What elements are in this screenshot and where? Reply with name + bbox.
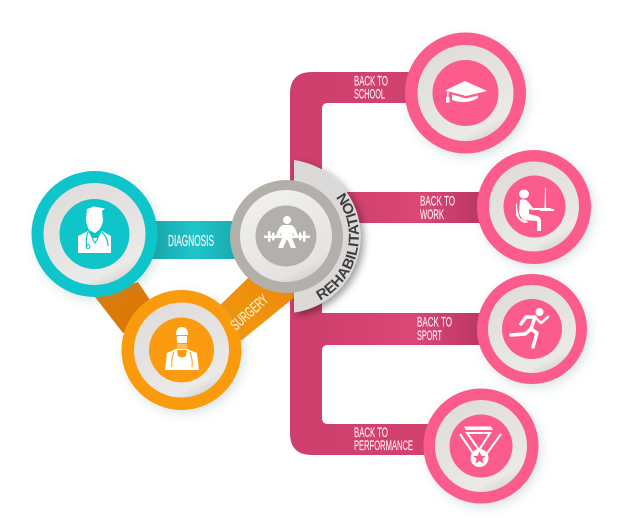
panel: rehabilitation arc <box>292 160 369 319</box>
label: back to work: WORK <box>420 206 444 222</box>
label: back to school <box>354 72 388 102</box>
connector: orange band to diagnosis <box>95 282 160 333</box>
connector: surgery band <box>215 278 296 345</box>
label: back to performance: BACK TO <box>354 424 388 440</box>
node: diagnosis <box>32 171 158 297</box>
icon: runner <box>511 308 548 347</box>
connector: pink branch network <box>290 72 490 455</box>
icon: doctor <box>78 206 111 253</box>
node: back to performance <box>424 388 538 504</box>
label: diagnosis: DIAGNOSIS <box>168 233 214 250</box>
connector: diagnosis band <box>150 221 240 259</box>
icon: person at desk <box>516 187 554 231</box>
icon: medal <box>460 426 501 467</box>
label: back to performance <box>354 424 413 453</box>
node: surgery <box>122 290 242 410</box>
icon: graduation cap <box>445 81 487 102</box>
node: back to work <box>477 150 591 264</box>
label: back to performance: PERFORMANCE <box>354 437 413 453</box>
label: back to school: SCHOOL <box>354 86 385 102</box>
label: back to sport: SPORT <box>417 327 442 343</box>
node: back to sport <box>477 274 587 384</box>
node: back to school <box>405 32 526 154</box>
label: back to work <box>420 192 455 222</box>
label: back to sport: BACK TO <box>417 314 452 330</box>
label: surgery: SURGERY <box>227 291 272 334</box>
label: back to school: BACK TO <box>354 72 388 88</box>
icon: surgeon <box>165 327 199 370</box>
label: back to sport <box>417 314 452 343</box>
icon: weightlifter <box>264 216 310 248</box>
label: back to work: BACK TO <box>420 192 455 208</box>
node: rehabilitation hub <box>230 180 343 293</box>
label: rehabilitation: REHABILITATION <box>316 192 359 300</box>
